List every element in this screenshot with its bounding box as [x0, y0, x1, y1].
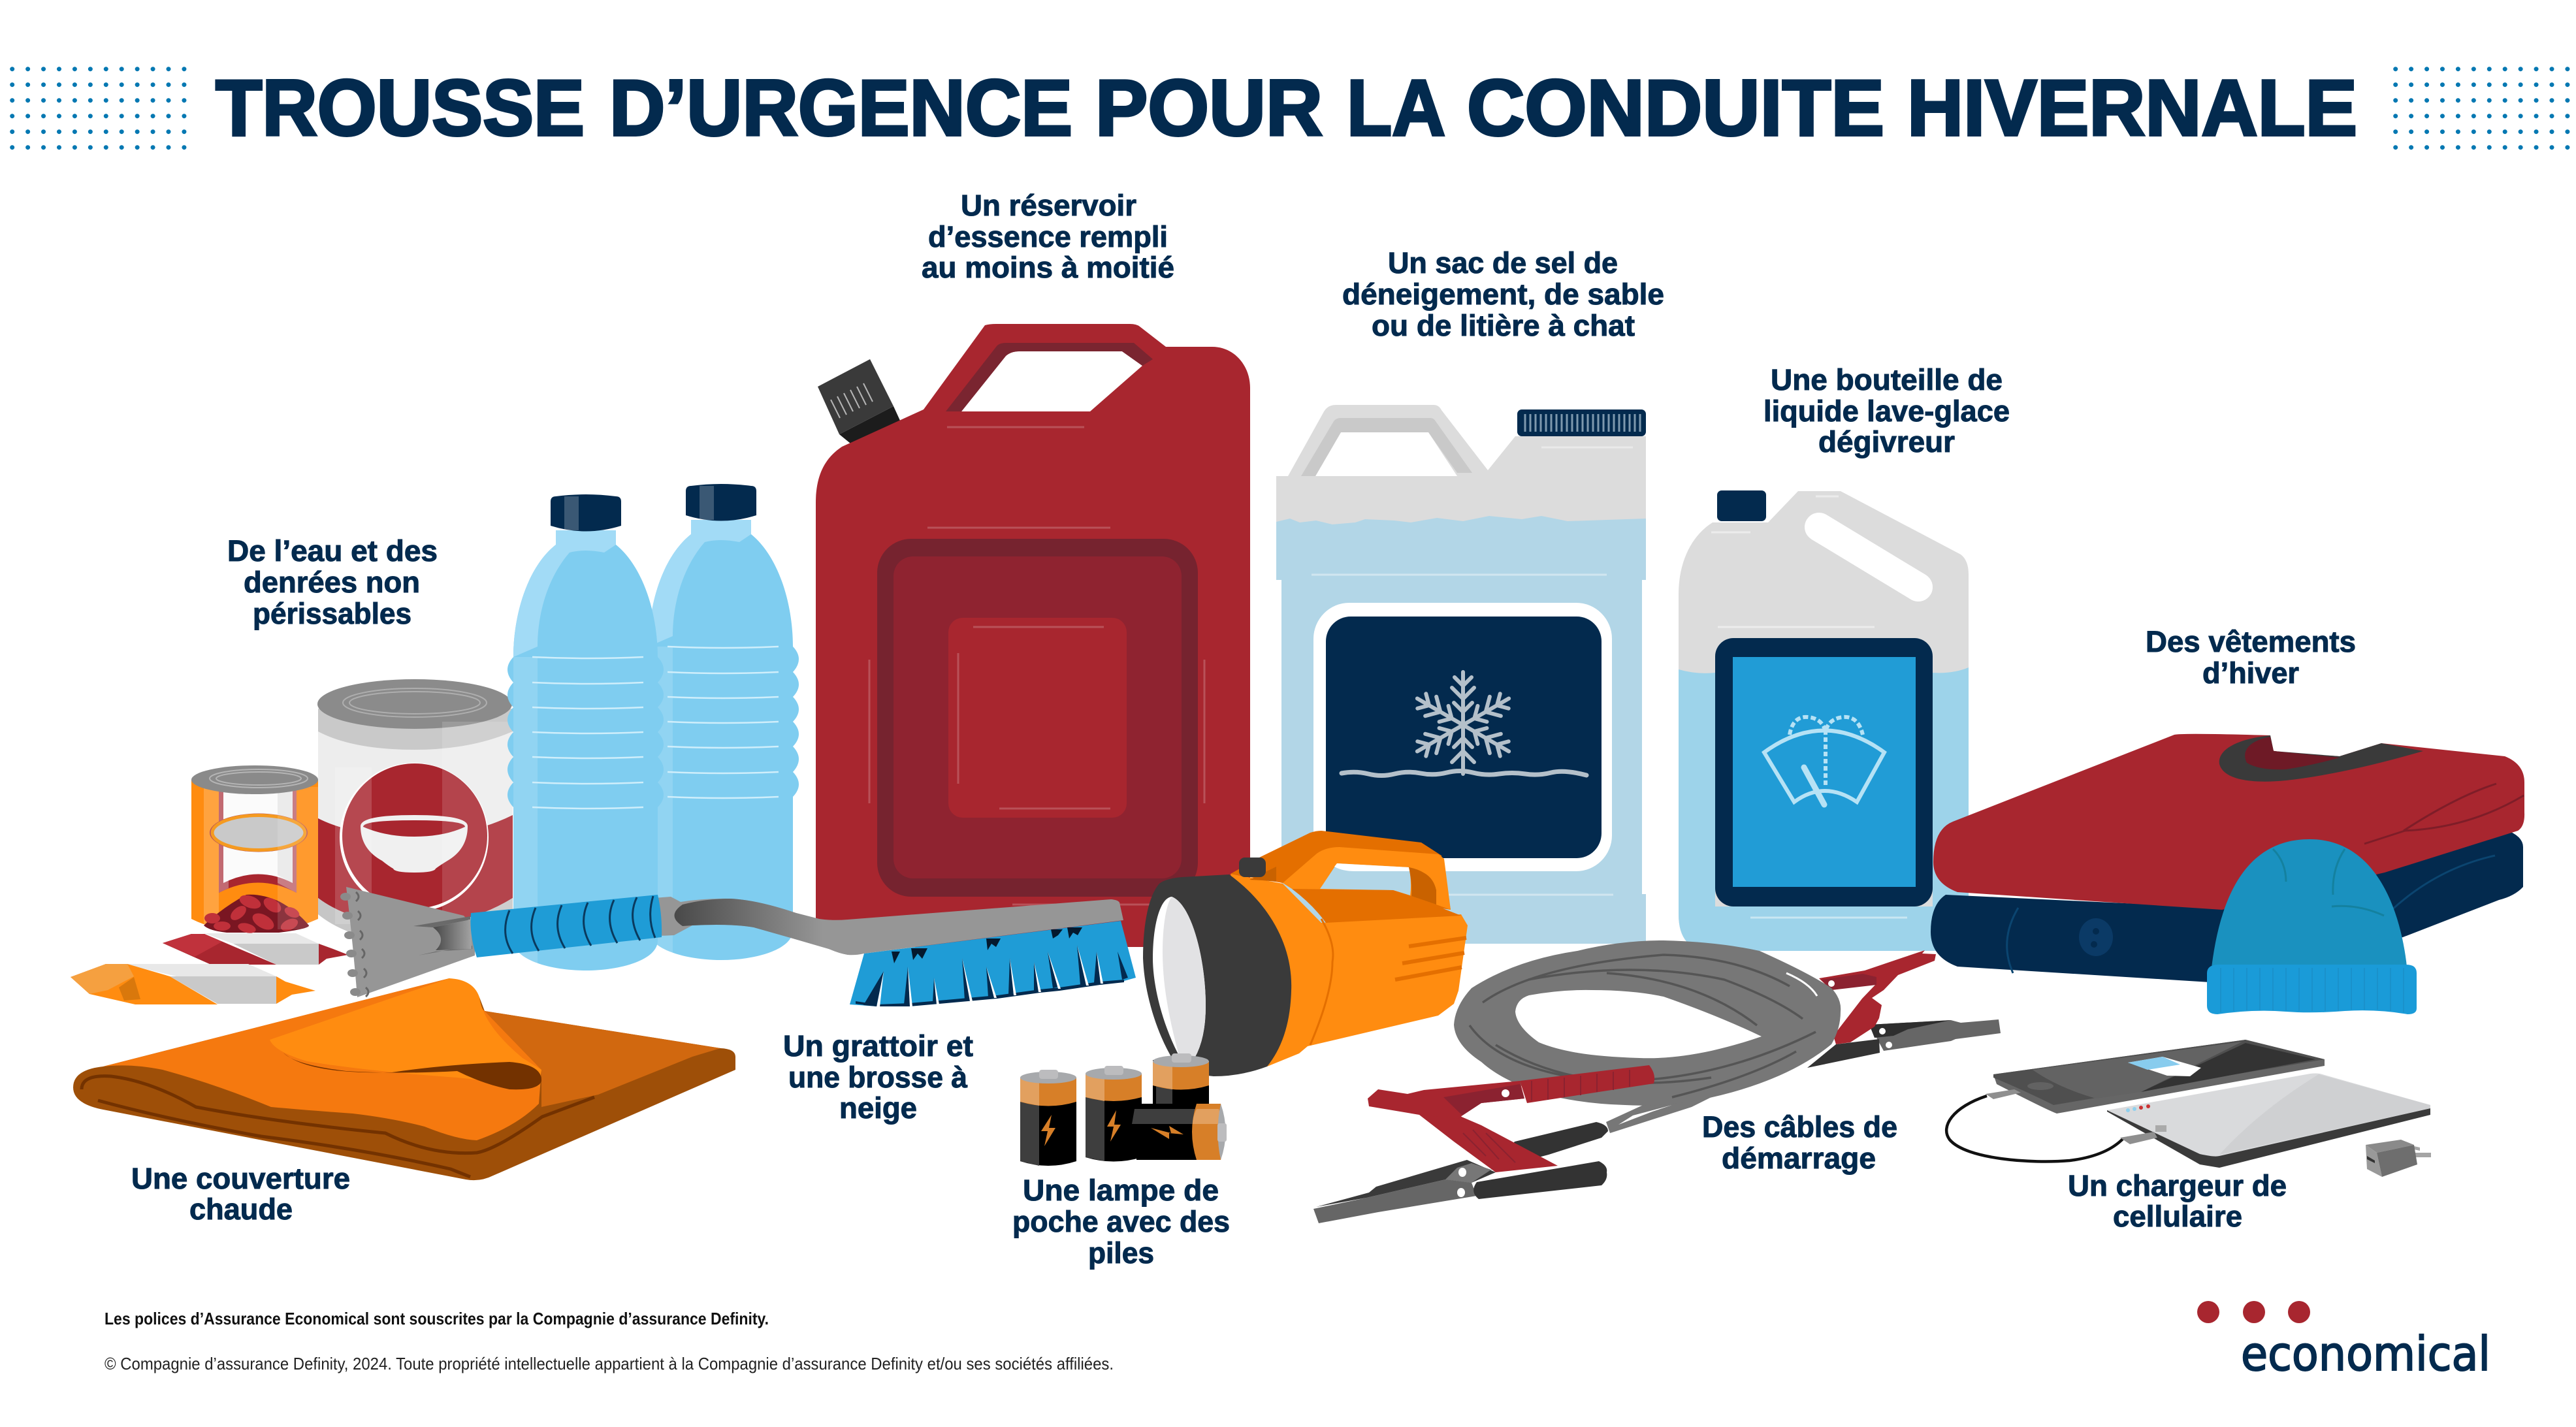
water bottle back — [643, 484, 799, 960]
label: scraper and brush: Un grattoir et — [783, 1029, 973, 1063]
icon: jerry can cap — [818, 359, 901, 446]
icon: phone — [1986, 1040, 2325, 1114]
label: winter clothes: d’hiver — [2202, 656, 2299, 690]
label: blanket: chaude — [189, 1193, 293, 1226]
icon: scraper blade — [340, 887, 475, 997]
water bottle front — [507, 494, 664, 970]
label: flashlight: Une lampe de — [1023, 1174, 1219, 1207]
label: water and food: périssables — [253, 597, 411, 630]
left red clamp — [1368, 1065, 1654, 1172]
red jerry can — [816, 324, 1250, 947]
icon: flashlight handle — [1231, 831, 1451, 910]
jumper cables — [1313, 940, 2001, 1223]
scraper handle — [654, 897, 1123, 955]
label: water and food — [227, 534, 438, 630]
label: salt bag: déneigement, de sable — [1342, 278, 1664, 311]
label: flashlight — [1012, 1174, 1230, 1270]
small food can — [191, 765, 318, 935]
salt bag jug — [1276, 405, 1646, 944]
title: TROUSSE — [216, 63, 585, 152]
label: blanket — [131, 1162, 350, 1226]
flashlight body — [1231, 874, 1468, 1066]
title — [216, 63, 2357, 152]
label: phone charger: cellulaire — [2113, 1200, 2242, 1233]
lens ring — [1143, 874, 1291, 1076]
label: gas tank: Un réservoir — [961, 189, 1136, 222]
back battery — [1153, 1053, 1209, 1110]
left battery — [1020, 1070, 1076, 1166]
label: washer fluid: liquide lave-glace — [1763, 394, 2010, 428]
dot pattern left — [12, 69, 186, 148]
title: LA — [1347, 63, 1445, 152]
label panel — [219, 787, 297, 893]
icon: wall charger — [2366, 1140, 2431, 1177]
label: water and food: De l’eau et des — [227, 534, 438, 568]
navy sweater — [1931, 829, 2523, 982]
scraper with brush — [340, 887, 1136, 1007]
label: jumper cables: démarrage — [1722, 1142, 1876, 1175]
label: washer fluid: dégivreur — [1818, 425, 1955, 458]
title: D’URGENCE — [609, 63, 1072, 152]
label: winter clothes: Des vêtements — [2146, 625, 2356, 658]
label: gas tank: d’essence rempli — [928, 220, 1168, 253]
cable coil — [1454, 940, 1841, 1106]
label: flashlight: piles — [1088, 1236, 1154, 1270]
cable tail — [1606, 1084, 1724, 1133]
label: washer fluid — [1763, 363, 2010, 458]
orange flashlight — [1143, 831, 1468, 1076]
icon: jug cap — [1517, 409, 1646, 436]
icon: power bank — [2107, 1074, 2430, 1168]
right black clamp — [1807, 1019, 2001, 1068]
icon: soup bowl — [361, 815, 468, 873]
middle battery — [1086, 1066, 1142, 1161]
label: jumper cables — [1702, 1110, 1897, 1175]
left black clamp handle — [1457, 1161, 1607, 1199]
beans — [204, 893, 309, 935]
label: gas tank: au moins à moitié — [922, 251, 1174, 284]
icon: windshield washer — [1764, 717, 1884, 805]
label: blanket: Une couverture — [131, 1162, 350, 1195]
washer fluid jug — [1679, 490, 1969, 951]
label: scraper and brush: neige — [839, 1091, 917, 1125]
phone and power bank — [1946, 1040, 2431, 1177]
economical logo — [2197, 1301, 2490, 1381]
large soup can — [317, 679, 513, 942]
label: winter clothes — [2146, 625, 2356, 690]
right red clamp — [1819, 950, 1936, 1044]
footer copyright note: © Compagnie d’assurance Definity, 2024. Toute propriété intellectuelle appartient à la Compagnie d’assurance Definity et/ou ses sociétés affiliées. — [105, 1354, 1114, 1373]
label: scraper and brush: une brosse à — [788, 1061, 968, 1094]
label: washer fluid: Une bouteille de — [1771, 363, 2003, 396]
icon: charging cable — [1946, 1096, 2123, 1161]
label: salt bag: Un sac de sel de — [1388, 246, 1618, 280]
icon: blue grip — [470, 895, 662, 957]
label: salt bag — [1342, 246, 1664, 342]
icon: button — [2079, 918, 2113, 956]
dot pattern right — [2396, 69, 2569, 148]
batteries — [1020, 1053, 1227, 1166]
label: jumper cables: Des câbles de — [1702, 1110, 1897, 1144]
icon: brush bristles — [850, 921, 1136, 1007]
red sweater — [1933, 734, 2524, 910]
snack bar red — [163, 933, 348, 965]
left black clamp back — [1313, 1122, 1608, 1223]
title: CONDUITE — [1467, 63, 1884, 152]
footer underwriting note: Les polices d’Assurance Economical sont souscrites par la Compagnie d’assurance Definity. — [105, 1309, 769, 1328]
lying battery — [1132, 1104, 1227, 1160]
label: phone charger: Un chargeur de — [2068, 1169, 2287, 1202]
label: water and food: denrées non — [244, 566, 420, 599]
folded winter clothes — [1931, 734, 2524, 982]
label: phone charger — [2068, 1169, 2287, 1233]
label: flashlight: poche avec des — [1012, 1205, 1230, 1238]
title: POUR — [1095, 63, 1323, 152]
snack bar orange — [71, 964, 315, 1004]
icon: snowflake on snow line — [1342, 672, 1586, 776]
economical logo: economical — [2241, 1326, 2490, 1381]
label: salt bag: ou de litière à chat — [1372, 309, 1635, 342]
folded blanket — [73, 978, 735, 1180]
winter hat — [2207, 839, 2417, 1014]
label: gas tank — [922, 189, 1174, 284]
label: scraper and brush — [783, 1029, 973, 1125]
title: HIVERNALE — [1907, 63, 2357, 152]
icon: switch — [1239, 858, 1276, 882]
